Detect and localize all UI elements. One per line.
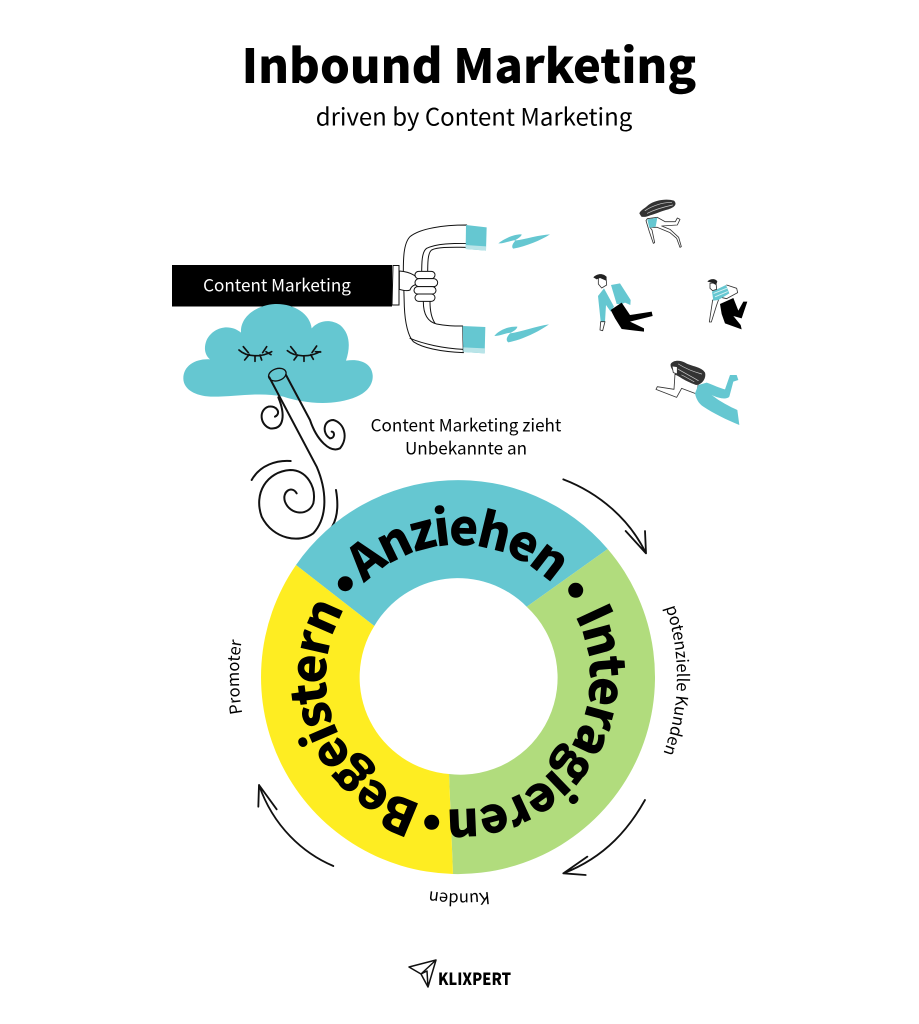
logo icon: paper plane <box>409 960 436 987</box>
stage labels <box>228 606 690 906</box>
ring label: Anziehen: Anziehen <box>350 505 564 584</box>
ring label: Interagieren: Interagieren <box>450 603 626 838</box>
top magnet pole <box>466 225 487 251</box>
content marketing arm <box>172 265 438 306</box>
lightning bolt top <box>498 234 550 249</box>
separator dots <box>338 576 583 830</box>
sleeve bar <box>172 265 392 306</box>
person: woman top <box>639 200 681 247</box>
hand <box>399 271 438 301</box>
label: potenzielle Kunden: potenzielle Kunden <box>662 606 690 754</box>
segment: Anziehen <box>296 480 608 626</box>
nose tube ellipse <box>267 366 288 383</box>
segment: Interagieren <box>449 549 655 874</box>
person: man right <box>707 279 747 329</box>
closed eyes <box>239 346 321 361</box>
segment: Begeistern <box>261 565 453 874</box>
sleeve cuff <box>392 266 399 305</box>
donut cycle chart <box>261 480 655 874</box>
subtitle: driven by Content Marketing <box>316 98 633 132</box>
arrow: to potential customers <box>563 479 646 553</box>
person: man left <box>593 274 653 332</box>
cloud shape <box>183 304 373 403</box>
label: Promoter: Promoter <box>228 639 242 714</box>
bottom magnet pole <box>463 326 485 353</box>
sleeve label: Content Marketing <box>203 272 351 296</box>
magnet illustration <box>403 225 550 353</box>
label: content marketing attracts strangers: Unbekannte an <box>405 434 527 460</box>
lightning bolt bottom <box>494 324 549 342</box>
cycle arrows <box>258 479 646 875</box>
logo wordmark: KLIXPERT <box>438 965 511 990</box>
magnet inner highlight <box>410 247 466 349</box>
title: Inbound Marketing <box>242 28 696 97</box>
person: woman bottom <box>656 361 739 425</box>
floating people <box>593 200 747 425</box>
arrow: to promoters <box>258 785 333 866</box>
cloud blowing wind <box>183 304 373 539</box>
wind swirls <box>252 375 345 539</box>
ring label: Begeistern: Begeistern <box>291 602 418 838</box>
arrow: to customers <box>563 800 645 875</box>
pole hatching <box>463 245 486 353</box>
logo: Klixpert <box>409 960 511 990</box>
label: content marketing attracts strangers <box>371 412 562 460</box>
magnet body <box>403 225 467 353</box>
label: Kunden: Kunden <box>430 891 489 906</box>
label: content marketing attracts strangers: Content Marketing zieht <box>371 412 562 436</box>
